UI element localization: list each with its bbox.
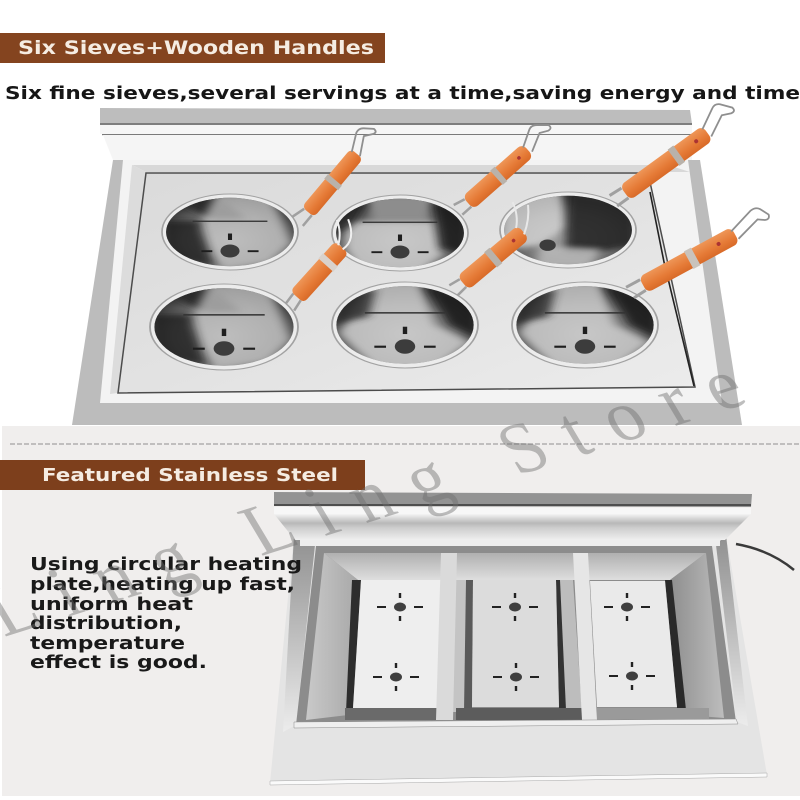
heading: Six Sieves + Wooden Handles: [0, 33, 385, 63]
wooden handle 4: [273, 214, 366, 313]
tub opening: [296, 546, 736, 725]
left wall: [306, 553, 358, 720]
back wall: [324, 553, 706, 580]
description text: effect is good.: [30, 652, 207, 673]
shadows: [346, 580, 361, 712]
sieve 6: [512, 282, 658, 368]
wooden handle 2: [449, 117, 558, 218]
sieve 4: [150, 284, 298, 370]
wooden handle 3: [603, 98, 742, 209]
description text: temperature: [30, 633, 185, 654]
description text: uniform heat: [30, 594, 193, 615]
right edge shadow: [650, 192, 694, 386]
description text: plate,heating up fast,: [30, 574, 295, 595]
heading: Six Sieves + Wooden Handles: Six Sieves+Wooden Handles: [18, 37, 374, 59]
heating plate 3: [590, 581, 677, 707]
right wall: [670, 553, 724, 718]
lower section background: [2, 426, 800, 796]
wooden handle 6: [622, 204, 774, 301]
wooden handle 1: [288, 122, 383, 229]
subtitle text: Six fine sieves,several servings at a time,saving energy and time: [5, 83, 800, 104]
heading: Featured Stainless Steel: Featured Stainless Steel: [42, 465, 338, 486]
wooden handle 5: [435, 196, 546, 298]
sieve 1: [162, 194, 298, 270]
divider 2: [573, 553, 597, 720]
divider 1: [436, 553, 457, 720]
heating plate 2: [472, 580, 559, 707]
sieve 2: [332, 195, 468, 271]
back lip: [274, 492, 752, 546]
dashed divider: [10, 443, 800, 445]
heating plate 1: [353, 580, 441, 708]
hole patterns: [373, 593, 655, 691]
sieve 3: [500, 192, 636, 268]
lower rim: [294, 719, 738, 728]
power cable: [736, 544, 794, 570]
front panel and frame: [270, 535, 767, 785]
product photo: cooker interior with three heating plates: [270, 492, 794, 785]
cooker body: [72, 108, 742, 425]
description text: [30, 554, 302, 673]
product photo: noodle cooker top view with six sieves: [72, 98, 774, 425]
sieve 5: [332, 282, 478, 368]
steel plate: [118, 173, 695, 393]
description text: Using circular heating: [30, 554, 302, 575]
heading: Featured Stainless Steel: [0, 460, 365, 490]
description text: distribution,: [30, 613, 182, 634]
